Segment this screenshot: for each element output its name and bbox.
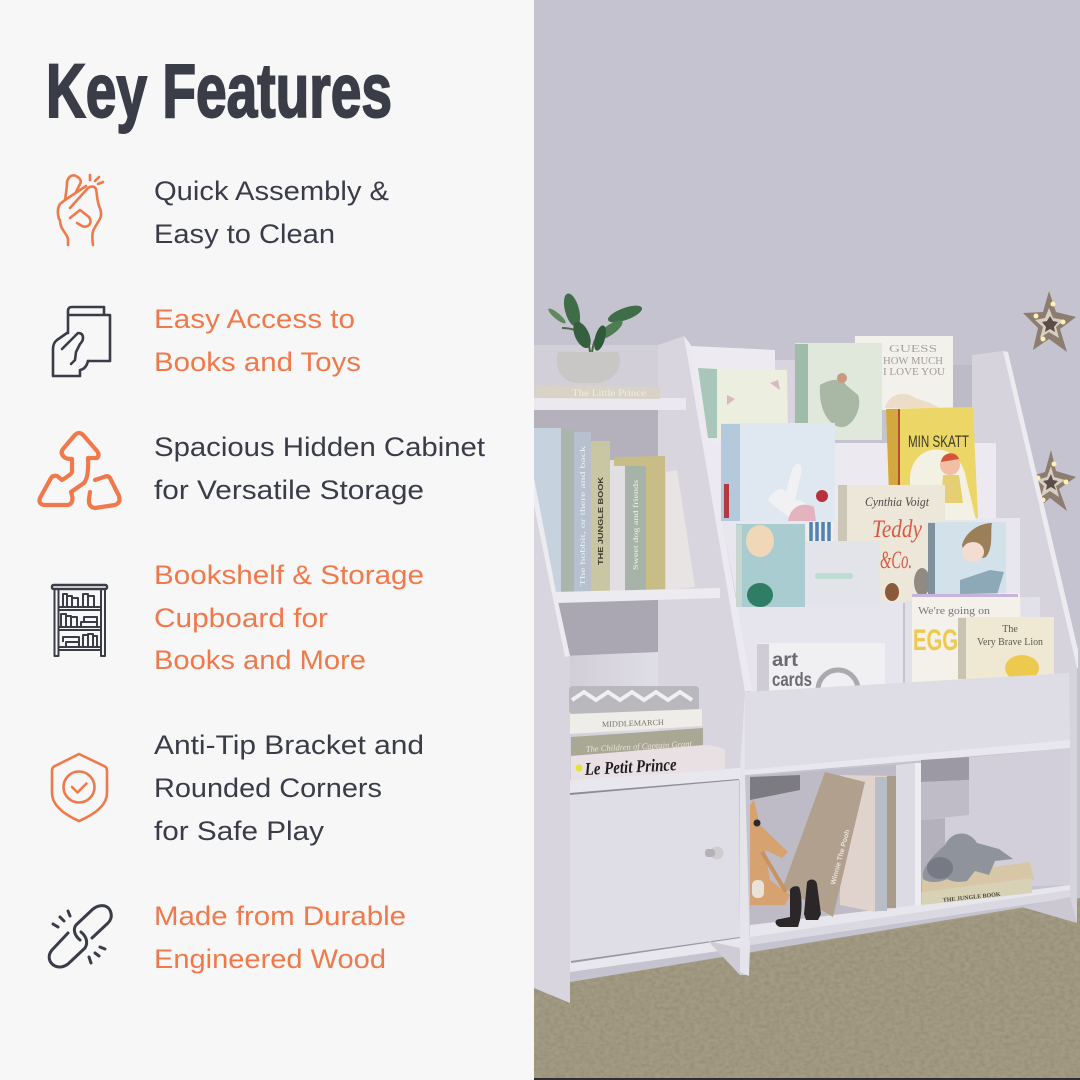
text: hidden cabinet: for Versatile Storage — [154, 475, 424, 505]
text: quick assembly: Easy to Clean — [154, 219, 335, 249]
leg right — [1022, 897, 1077, 923]
book: art cards: art — [772, 650, 799, 671]
book: art cards: cards — [772, 670, 812, 691]
book: Min Skatt yellow — [886, 407, 978, 520]
books and toy dragon — [922, 833, 1034, 905]
text: durable wood — [154, 901, 406, 974]
book: the very brave lion: Very Brave Lion — [977, 636, 1043, 648]
text: durable wood: Engineered Wood — [154, 944, 386, 974]
books on middle shelf — [534, 428, 695, 592]
text: hidden cabinet — [154, 432, 486, 505]
book: rabbit pale blue — [721, 423, 835, 521]
stacked books on cabinet — [569, 686, 725, 780]
wall — [534, 0, 1080, 1000]
book: The Little Prince: The Little Prince — [572, 388, 646, 398]
book: Teddy and Co: Cynthia Voigt — [865, 494, 929, 509]
book: art cards — [757, 643, 885, 710]
book: boy with windblown hair — [928, 522, 1006, 598]
feature 5: anti-tip and rounded corners — [52, 730, 424, 846]
book: the very brave lion — [958, 617, 1054, 681]
panel: background features panel — [0, 0, 534, 1080]
icon: hand holding book — [53, 307, 110, 376]
text: bookshelf and cupboard: Bookshelf & Storage — [154, 560, 424, 590]
book: going on an egg hunt: EGG — [913, 624, 958, 657]
book: guess how much i love you — [855, 336, 953, 410]
shelf carcass — [534, 336, 1078, 923]
front display box — [745, 673, 1070, 775]
book: guess how much i love you: I LOVE YOU — [883, 366, 945, 378]
book: dragon rider — [795, 343, 882, 440]
carpet — [534, 898, 1080, 1080]
left side panel — [534, 478, 720, 1003]
plant in pot — [547, 292, 644, 383]
text: bookshelf and cupboard — [154, 560, 424, 675]
book: guess how much i love you: HOW MUCH — [883, 355, 943, 367]
stacked books on cabinet: Le Petit Prince — [583, 754, 677, 779]
books in lower compartment — [783, 772, 896, 917]
book: Min Skatt yellow: MIN SKATT — [908, 432, 969, 451]
book: guess how much i love you: GUESS — [889, 343, 937, 355]
storage cabinet — [570, 692, 750, 976]
text: anti-tip: for Safe Play — [154, 816, 325, 846]
text: anti-tip — [154, 730, 424, 846]
text: bookshelf and cupboard: Cupboard for — [154, 603, 328, 633]
books on middle shelf: Sweet dog and friends — [632, 480, 640, 570]
icon: bookshelf — [52, 585, 107, 656]
title: Key Features — [46, 49, 392, 134]
text: easy access — [154, 304, 361, 377]
text: quick assembly — [154, 176, 389, 249]
star decoration bottom — [1035, 450, 1076, 511]
toy fox — [750, 800, 821, 927]
text: quick assembly: Quick Assembly & — [154, 176, 389, 206]
text: easy access: Books and Toys — [154, 347, 361, 377]
stacked books on cabinet: MIDDLEMARCH — [602, 718, 664, 729]
book: going on an egg hunt: We're going on — [918, 605, 991, 617]
icon: chain link — [49, 906, 111, 967]
display books — [698, 336, 1054, 710]
icon: shield with check — [52, 754, 107, 821]
feature 6: durable wood — [49, 901, 406, 974]
book: butterfly pale — [698, 368, 788, 438]
books on middle shelf: THE JUNGLE BOOK — [598, 477, 605, 565]
book: the very brave lion: The — [1002, 624, 1018, 635]
feature 3: hidden cabinet — [40, 432, 486, 508]
icon: three arrows — [40, 433, 120, 508]
panel: product photo of bookshelf — [534, 0, 1080, 1080]
text: anti-tip: Anti-Tip Bracket and — [154, 730, 424, 760]
book: Teddy and Co: &Co. — [880, 547, 912, 574]
book: hot air balloon — [736, 524, 805, 607]
books in lower compartment: Winnie The Pooh — [830, 829, 852, 886]
text: bookshelf and cupboard: Books and More — [154, 645, 366, 675]
books on middle shelf: The hobbit, or there and back — [579, 445, 587, 586]
stacked books on cabinet: The Children of Captain Grant — [586, 738, 693, 754]
text: hidden cabinet: Spacious Hidden Cabinet — [154, 432, 486, 462]
feature 2: easy access — [53, 304, 361, 377]
small blue striped cup — [806, 522, 833, 542]
star decoration top — [1023, 291, 1076, 352]
book: going on an egg hunt — [912, 593, 1022, 682]
text: easy access: Easy Access to — [154, 304, 355, 334]
text: durable wood: Made from Durable — [154, 901, 406, 931]
book: Teddy and Co: Teddy — [872, 516, 923, 543]
lower compartments — [750, 748, 1070, 945]
feature 1: quick assembly — [58, 175, 389, 249]
book: pale illustrated — [805, 541, 880, 605]
text: anti-tip: Rounded Corners — [154, 773, 382, 803]
book: The Little Prince — [535, 385, 660, 399]
book: Teddy and Co — [838, 485, 945, 601]
feature 4: bookshelf and cupboard — [52, 560, 424, 675]
icon: finger snap hand — [58, 175, 103, 245]
books and toy dragon: THE JUNGLE BOOK — [943, 892, 1001, 904]
